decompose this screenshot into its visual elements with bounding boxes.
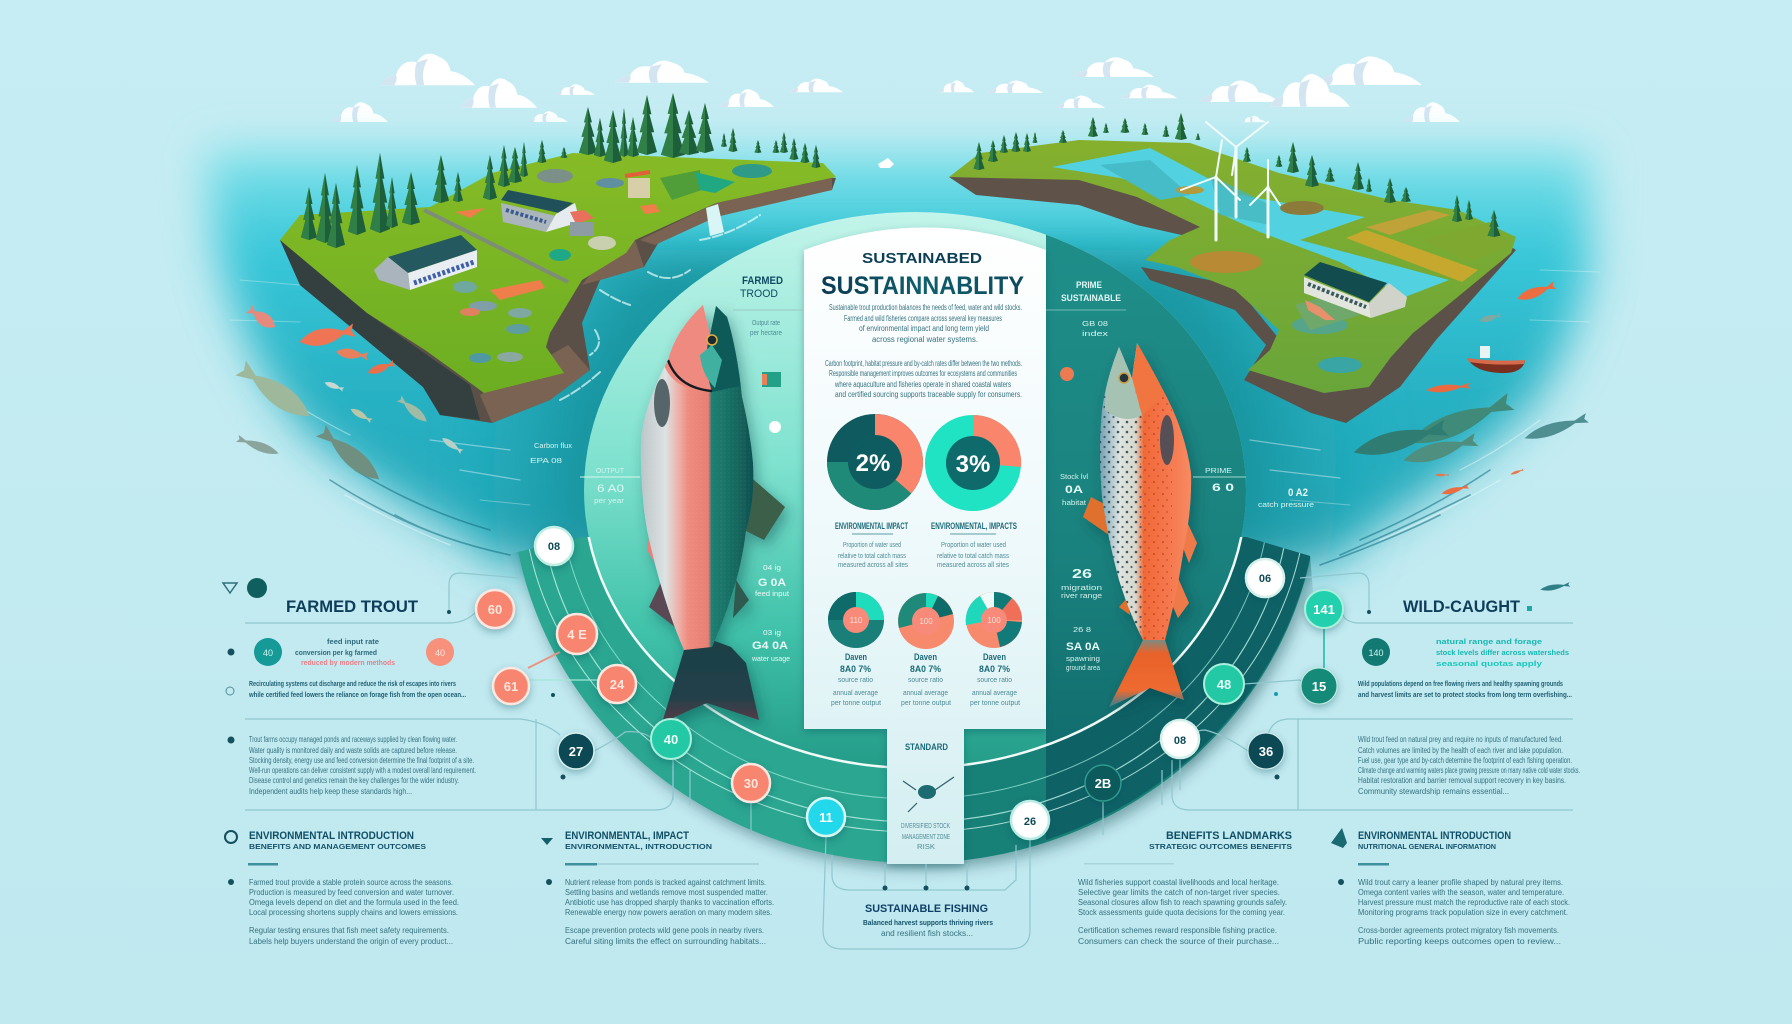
block: outer wild heading: Cross-border agreements protect migratory fish movements. (1358, 926, 1559, 935)
small white boat at sea (878, 158, 894, 168)
crop fields (1176, 186, 1510, 373)
small donut captions: source ratio (838, 677, 873, 684)
donut captions: ENVIRONMENTAL IMPACT (835, 521, 908, 531)
panel intro text: and certified sourcing supports traceable supply for consumers. (835, 390, 1022, 399)
small donut captions: 8A0 7% (979, 664, 1010, 674)
far right dark band (1046, 537, 1310, 840)
farmed summary text: Recirculating systems cut discharge and reduce the risk of escapes into rivers (249, 679, 456, 688)
block: nutritional information 1: Local processing shortens supply chains and lowers emissions. (249, 908, 458, 917)
icon: dark dot (247, 578, 267, 598)
icon: leaf arrow (1331, 828, 1347, 848)
barn two (501, 190, 594, 236)
small labels on right circle: 26 8 (1073, 627, 1091, 634)
icon: small fish (1540, 582, 1570, 592)
ponds and channels (1052, 148, 1449, 297)
stem panel content: MANAGEMENT ZONE (902, 834, 950, 841)
wild paragraph: Catch volumes are limited by the health of each river and lake population. (1358, 746, 1563, 755)
wild paragraph: Habitat restoration and barrier removal support recovery in key basins. (1358, 776, 1566, 785)
bubble: coral 3: 61 (504, 679, 518, 694)
bubble: coral 3 (493, 668, 529, 704)
small donut 2: 100 (919, 617, 933, 626)
small donut captions: source ratio (977, 677, 1012, 684)
block: nutritional information 2: Renewable energy now powers aeration on many modern sites. (565, 908, 772, 917)
wild summary row: stock levels differ across watersheds (1436, 648, 1569, 657)
wild paragraph (1358, 735, 1580, 796)
heading: farmed trout: FARMED TROUT (286, 597, 419, 616)
icon: fish silhouette (918, 785, 936, 799)
block: nutritional information 2: Antibiotic use has dropped sharply thanks to vaccination efforts. (565, 898, 774, 907)
panel intro text: Carbon footprint, habitat pressure and by-catch rates differ between the two methods. (825, 359, 1022, 368)
small labels on left circle: 03 ig (763, 630, 781, 637)
bubble: teal 15 (1301, 668, 1337, 704)
bubble: coral 1 (476, 590, 514, 628)
small labels on left circle: EPA 08 (530, 458, 562, 465)
wild summary row: 140 (1368, 648, 1384, 658)
block: inner wild heading: STRATEGIC OUTCOMES BENEFITS (1149, 842, 1292, 851)
barn one (374, 235, 477, 290)
block: inner wild heading: Seasonal closures allow fish to reach spawning grounds safely. (1078, 898, 1287, 907)
bubble: dark 36: 36 (1259, 744, 1273, 759)
donut captions: ENVIRONMENTAL, IMPACTS (931, 521, 1017, 531)
stem panel content: RISK (917, 844, 935, 851)
farmed paragraph: Trout farms occupy managed ponds and raceways supplied by clean flowing water. (249, 735, 457, 744)
bubble: white upper left: 08 (548, 541, 560, 553)
small labels on left circle: per year (594, 498, 625, 505)
small labels on right circle: spawning (1066, 656, 1100, 663)
side oval (654, 379, 670, 427)
stem panel content: DIVERSIFIED STOCK (901, 823, 950, 830)
small donut captions (831, 652, 1020, 707)
bubble: coral 2: 4 E (567, 627, 587, 642)
small labels on left circle: per hectare (750, 330, 782, 337)
connector end dots (447, 610, 1371, 890)
central information panel (804, 228, 1046, 864)
small labels on right circle: migration (1061, 585, 1102, 592)
left island: farm (280, 93, 836, 423)
small labels on left circle: OUTPUT (596, 468, 625, 475)
foam (560, 215, 760, 400)
donut captions: relative to total catch mass (937, 553, 1009, 560)
sustainable fishing callout: SUSTAINABLE FISHING (865, 903, 988, 915)
small labels on left circle: water usage (751, 656, 790, 663)
block: nutritional information 2: ENVIRONMENTAL, IMPACT (565, 830, 689, 842)
eye (1119, 373, 1129, 383)
small donut captions: 8A0 7% (910, 664, 941, 674)
bubble: cyan: 11 (819, 810, 833, 825)
bubble: dark 27: 27 (569, 744, 583, 759)
block: inner wild heading: Consumers can check the source of their purchase... (1078, 937, 1279, 946)
head (1105, 347, 1142, 419)
panel intro text (825, 303, 1022, 399)
gill line (668, 360, 712, 391)
small labels on left circle: FARMED (742, 275, 783, 287)
farmed paragraph: Stocking density, energy use and feed conversion determine the final footprint of a site. (249, 756, 474, 765)
block: nutritional information 1 (225, 830, 459, 946)
panel intro text: Responsible management improves outcomes for ecosystems and communities (829, 369, 1017, 378)
eye (707, 335, 717, 345)
decorative chips in circle (762, 367, 1074, 433)
small labels on right circle: index (1082, 331, 1109, 338)
sustainable fishing callout (863, 903, 993, 938)
small donut captions: per tonne output (970, 700, 1020, 707)
cliffs (280, 170, 836, 423)
field rows (660, 170, 702, 200)
wild summary text: Wild populations depend on free flowing rivers and healthy spawning grounds (1358, 679, 1563, 688)
small donut 1 (828, 592, 884, 648)
bubble: dark 36 (1248, 733, 1284, 769)
bubble: white upper right: 06 (1259, 573, 1271, 585)
block: nutritional information 1: ENVIRONMENTAL INTRODUCTION (249, 830, 414, 842)
small labels on right circle: SA 0A (1066, 641, 1100, 653)
bubble: white upper left (535, 527, 573, 565)
wild paragraph: Wild trout feed on natural prey and require no inputs of manufactured feed. (1358, 735, 1563, 744)
farmed summary row: conversion per kg farmed (295, 648, 377, 657)
small donut captions: annual average (972, 690, 1017, 697)
conifers (974, 113, 1500, 237)
right island: sustainable farm with wind turbines (949, 113, 1516, 423)
farm ponds and crops (453, 169, 660, 363)
connector lines (245, 573, 1573, 949)
right darker half of disc (964, 537, 1310, 860)
wild summary text (1358, 679, 1572, 699)
farmed summary row: feed input rate (327, 637, 379, 646)
small labels on left circle: G4 0A (752, 640, 788, 652)
farmed summary row: 40 (435, 648, 445, 658)
outer teal disc (513, 537, 1313, 878)
wind turbines (1181, 122, 1280, 240)
small labels on right circle: SUSTAINABLE (1061, 293, 1121, 303)
block: outer wild heading: NUTRITIONAL GENERAL INFORMATION (1358, 842, 1496, 851)
icon: leaf (225, 831, 237, 843)
block: outer wild heading: Public reporting keeps outcomes open to review... (1358, 937, 1561, 946)
bubble: mint right (1204, 664, 1244, 704)
bubble: coral 30: 30 (744, 776, 758, 791)
small donut 3: 100 (987, 616, 1001, 625)
stem panel content (901, 742, 954, 851)
lower right fin (733, 580, 749, 618)
donut chart: 3% (925, 415, 1021, 511)
block: nutritional information 1: Farmed trout provide a stable protein source across the seasons. (249, 878, 453, 887)
donut captions: measured across all sites (838, 562, 908, 569)
block: outer wild heading: Monitoring programs track population size in every catchment. (1358, 908, 1568, 917)
title (821, 250, 1024, 300)
cliffs (949, 170, 1204, 240)
block: inner wild heading: Wild fisheries support coastal livelihoods and local heritage. (1078, 878, 1279, 887)
small donut captions: Daven (983, 652, 1006, 662)
farmed summary row: 40 (263, 648, 273, 658)
small labels on left circle: Carbon flux (534, 443, 573, 450)
clouds (332, 54, 1460, 122)
bubble: mint 14 (1305, 590, 1343, 628)
left fish: farmed trout (630, 300, 785, 723)
bubble: mint 14: 141 (1313, 602, 1335, 617)
bubble: mint left (651, 719, 691, 759)
lower left fin (649, 580, 686, 627)
small donut captions: per tonne output (831, 700, 881, 707)
block: outer wild heading (1331, 828, 1570, 946)
farmed paragraph: Well-run operations can deliver consistent supply with a modest overall land requirement. (249, 766, 476, 775)
small labels on right circle: 0 A2 (1288, 487, 1308, 499)
small donut captions: Daven (914, 652, 937, 662)
road (424, 210, 568, 282)
concentric connector arcs (529, 537, 1300, 832)
block: outer wild heading: Wild trout carry a leaner profile shaped by natural prey items. (1358, 878, 1563, 887)
body (1095, 340, 1195, 645)
small labels on right circle: 6 0 (1212, 482, 1234, 494)
body (630, 300, 760, 660)
small labels on left circle: 04 ig (763, 565, 781, 572)
small donut 1: 110 (850, 616, 863, 625)
block: nutritional information 1: Regular testing ensures that fish meet safety requirements. (249, 926, 449, 935)
bubble: mint right: 48 (1217, 677, 1231, 692)
heading: farmed trout (223, 578, 419, 616)
bubble: dark 2B (1085, 765, 1121, 801)
small labels on right circle: PRIME (1205, 468, 1232, 475)
farmed summary row: reduced by modern methods (301, 658, 395, 667)
head coral (662, 305, 712, 392)
grass top (280, 153, 836, 393)
small donut captions: per tonne output (901, 700, 951, 707)
ocean (205, 150, 1600, 570)
donut chart: 2%: 2% (856, 450, 890, 477)
tail (1109, 640, 1184, 707)
small labels on left circle: 6 A0 (597, 483, 624, 495)
bubble: mint left: 40 (664, 732, 678, 747)
wild paragraph: Climate change and warming waters place growing pressure on many native cold water stocks. (1358, 766, 1580, 775)
small left fin (647, 525, 658, 563)
wild paragraph: Community stewardship remains essential... (1358, 787, 1509, 796)
small labels on left circle: G 0A (758, 577, 786, 589)
small donut captions: Daven (845, 652, 867, 662)
block: outer wild heading: ENVIRONMENTAL INTRODUCTION (1358, 830, 1511, 842)
panel intro text: Farmed and wild fisheries compare across several key measures (844, 314, 1002, 323)
side oval (1160, 415, 1174, 465)
block: nutritional information 2: Nutrient release from ponds is tracked against catchment limits. (565, 878, 766, 887)
small labels on right circle: 0A (1065, 484, 1083, 496)
fish and boat in right sea (1351, 280, 1589, 496)
bubble: coral 4: 24 (610, 677, 625, 692)
farmed paragraph: Water quality is monitored daily and waste solids are captured before release. (249, 746, 457, 755)
barn (1304, 262, 1407, 320)
bubble: dark 27 (558, 733, 594, 769)
bubble: white upper right (1246, 559, 1284, 597)
small labels on left circle: feed input (755, 591, 789, 598)
icon: down chevron (541, 838, 553, 845)
wild summary row: seasonal quotas apply (1436, 659, 1543, 668)
block: nutritional information 2: Escape prevention protects wild gene pools in nearby rivers. (565, 926, 764, 935)
block: inner wild heading: Selective gear limits the catch of non-target river species. (1078, 888, 1280, 897)
wild summary row (1362, 637, 1569, 668)
wild summary row: natural range and forage (1436, 637, 1542, 646)
block: nutritional information 1: Omega levels depend on diet and the formula used in the feed. (249, 898, 459, 907)
panel intro text: across regional water systems. (872, 335, 978, 344)
right fish: wild-caught trout (1083, 340, 1197, 707)
bubble: white middle (1161, 720, 1199, 758)
bubble: coral 30 (732, 764, 770, 802)
block: outer wild heading: Harvest pressure must match the reproductive rate of each stock. (1358, 898, 1570, 907)
small labels on right circle: river range (1061, 593, 1102, 600)
small labels on right circle: Stock lvl (1060, 474, 1088, 481)
bubble: cyan (807, 798, 845, 836)
small labels on right circle (1046, 280, 1314, 672)
panel intro text: Sustainable trout production balances the needs of feed, water and wild stocks. (829, 303, 1022, 312)
farmed summary row (228, 637, 454, 667)
donut captions: measured across all sites (937, 562, 1009, 569)
wild summary text: and harvest limits are set to protect stocks from long term overfishing... (1358, 690, 1572, 699)
sustainable fishing callout: Balanced harvest supports thriving rivers (863, 918, 993, 927)
bubble: coral 2 (557, 614, 597, 654)
bubble: white middle: 08 (1174, 735, 1186, 747)
block: outer wild heading: Omega content varies with the season, water and temperature. (1358, 888, 1564, 897)
fish in left sea (234, 304, 464, 486)
block: nutritional information 1: Production is measured by feed conversion and water turnover. (249, 888, 454, 897)
wild paragraph: Fuel use, gear type and by-catch determine the footprint of each fishing operation. (1358, 756, 1572, 765)
small donut captions: 8A0 7% (840, 664, 871, 674)
small labels on right circle: 26 (1072, 566, 1092, 581)
icon: triangle badge (223, 583, 237, 593)
wave streaks (230, 270, 1600, 565)
small labels on right circle: GB 08 (1082, 321, 1108, 328)
inner circle (584, 200, 1256, 780)
farmed summary text (226, 679, 466, 699)
donut captions: Proportion of water used (941, 542, 1006, 549)
block: inner wild heading: BENEFITS LANDMARKS (1166, 830, 1292, 842)
bubble: dark 2B: 2B (1095, 776, 1111, 791)
block: inner wild heading: Stock assessments guide quota decisions for the coming year. (1078, 908, 1285, 917)
small labels on right circle: ground area (1066, 665, 1100, 672)
sustainable fishing callout: and resilient fish stocks... (881, 929, 973, 938)
small donut captions: annual average (833, 690, 878, 697)
donut chart: 3%: 3% (956, 451, 990, 478)
small donut 3 (966, 592, 1022, 648)
waterfall (706, 204, 724, 236)
farmed summary text: while certified feed lowers the reliance on forage fish from the open ocean... (248, 690, 466, 699)
panel intro text: of environmental impact and long term yield (859, 324, 989, 333)
farmed paragraph (228, 735, 476, 796)
panel intro text: where aquaculture and fisheries operate in shared coastal waters (834, 380, 1011, 389)
block: nutritional information 2: Settling basins and wetlands remove most suspended matter. (565, 888, 768, 897)
bubble: coral 4 (598, 665, 636, 703)
donut captions: relative to total catch mass (838, 553, 906, 560)
right teal half of circle (1046, 234, 1246, 744)
bubble: white lower: 26 (1024, 816, 1036, 828)
heading: wild-caught: WILD-CAUGHT (1403, 597, 1521, 616)
bubble: white lower (1011, 801, 1049, 839)
small labels on left circle: Output rate (752, 320, 780, 327)
title: SUSTAINABED (862, 250, 982, 267)
donut chart: 2% (827, 414, 923, 510)
block: nutritional information 2: ENVIRONMENTAL, INTRODUCTION (565, 842, 712, 851)
farmed paragraph: Independent audits help keep these standards high... (249, 787, 412, 796)
pectoral fin right (744, 473, 785, 540)
fishing boat (1467, 346, 1525, 373)
conifers (301, 93, 820, 248)
grass (949, 140, 1516, 393)
bubble: teal 15: 15 (1312, 679, 1326, 694)
small donut captions: source ratio (908, 677, 943, 684)
small labels on left circle: TROOD (740, 288, 778, 300)
heading: wild-caught (1403, 582, 1570, 616)
donut captions (835, 521, 1017, 569)
donut captions: Proportion of water used (843, 542, 901, 549)
tail (662, 640, 759, 723)
small labels on right circle: catch pressure (1258, 502, 1314, 509)
stem panel content: STANDARD (905, 742, 948, 752)
small donut captions: annual average (903, 690, 948, 697)
bubble: coral 1: 60 (488, 602, 502, 617)
block: inner wild heading: Certification schemes reward responsible fishing practice. (1078, 926, 1277, 935)
small donut 2 (898, 593, 954, 649)
block: nutritional information 2: Careful siting limits the effect on surrounding habitats... (565, 937, 766, 946)
title: SUSTAINNABLITY (821, 272, 1024, 300)
head teal (707, 306, 741, 392)
small labels on right circle: PRIME (1076, 280, 1102, 290)
block: inner wild heading (1078, 830, 1292, 946)
small labels on right circle: habitat (1062, 500, 1086, 507)
small labels on left circle (530, 275, 804, 663)
block: nutritional information 1: Labels help buyers understand the origin of every product... (249, 937, 453, 946)
block: nutritional information 2 (541, 830, 774, 946)
block: nutritional information 1: BENEFITS AND MANAGEMENT OUTCOMES (249, 842, 426, 851)
farmed paragraph: Disease control and genetics remain the key challenges for the wider industry. (249, 776, 459, 785)
fins (1083, 497, 1109, 535)
